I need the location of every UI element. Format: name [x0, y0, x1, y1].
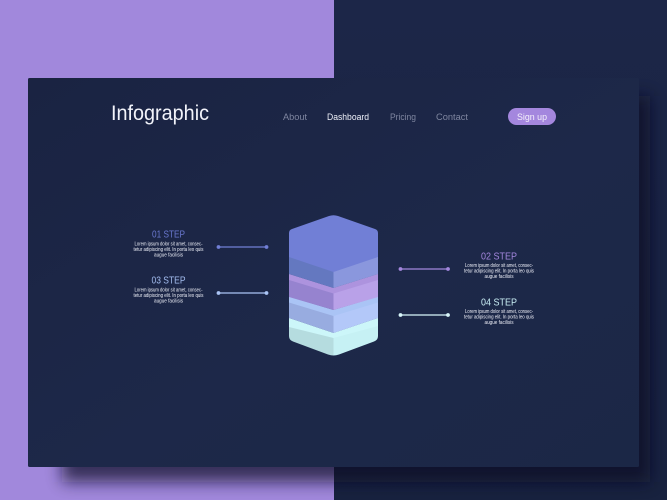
step 04 connector [399, 313, 450, 317]
step 04 body text: augue facilisis [484, 320, 514, 326]
step 02 body text: tetur adipiscing elit. In porta leo quis [464, 268, 534, 274]
step 03 body text: tetur adipiscing elit. In porta leo quis [134, 293, 204, 299]
step 01 connector [217, 245, 268, 249]
layer: purple [289, 274, 378, 310]
background: purple panel [0, 0, 334, 500]
step 04 body text: Lorem ipsum dolor sit amet, consec- [465, 309, 533, 315]
layer: blue [289, 250, 378, 288]
navigation [283, 112, 468, 122]
step 02 [399, 250, 534, 280]
step 03 body text: augue facilisis [154, 298, 183, 304]
step 02 body text: Lorem ipsum dolor sit amet, consec- [465, 263, 533, 269]
top face [289, 215, 378, 272]
step 01 body text: Lorem ipsum dolor sit amet, consec- [134, 242, 203, 248]
background: dark panel [334, 0, 667, 500]
step 03 [134, 274, 268, 304]
nav item: About: About [283, 112, 307, 122]
title: Infographic [111, 102, 209, 125]
nav item: Pricing: Pricing [390, 112, 416, 122]
sign up button: Sign up [517, 112, 547, 122]
step 02 connector [399, 267, 450, 271]
isometric layered stack [289, 215, 378, 356]
sign up button [508, 108, 556, 125]
card shadow [62, 96, 650, 482]
step 04 body text [464, 309, 534, 326]
step 01 body text: augue facilisis [154, 252, 183, 258]
step 02 heading: 02 STEP [481, 250, 517, 262]
step 04 body text: tetur adipiscing elit. In porta leo quis [464, 314, 534, 320]
main card [28, 78, 639, 467]
step 01 body text: tetur adipiscing elit. In porta leo quis [134, 247, 204, 253]
layer: mint [289, 318, 378, 356]
step 02 body text [464, 263, 534, 280]
layer: light blue [289, 296, 378, 333]
step 01 [134, 228, 268, 258]
step 01 heading: 01 STEP [152, 228, 185, 240]
step 04 heading: 04 STEP [481, 296, 517, 308]
step 03 body text: Lorem ipsum dolor sit amet, consec- [134, 288, 203, 294]
step 01 body text [134, 242, 204, 258]
step 03 heading: 03 STEP [152, 274, 186, 286]
step 04 [399, 296, 534, 326]
step 02 body text: augue facilisis [484, 274, 514, 280]
nav item: Dashboard: Dashboard [327, 112, 369, 122]
step 03 body text [134, 288, 204, 304]
nav item: Contact: Contact [436, 112, 468, 122]
step 03 connector [217, 291, 268, 295]
